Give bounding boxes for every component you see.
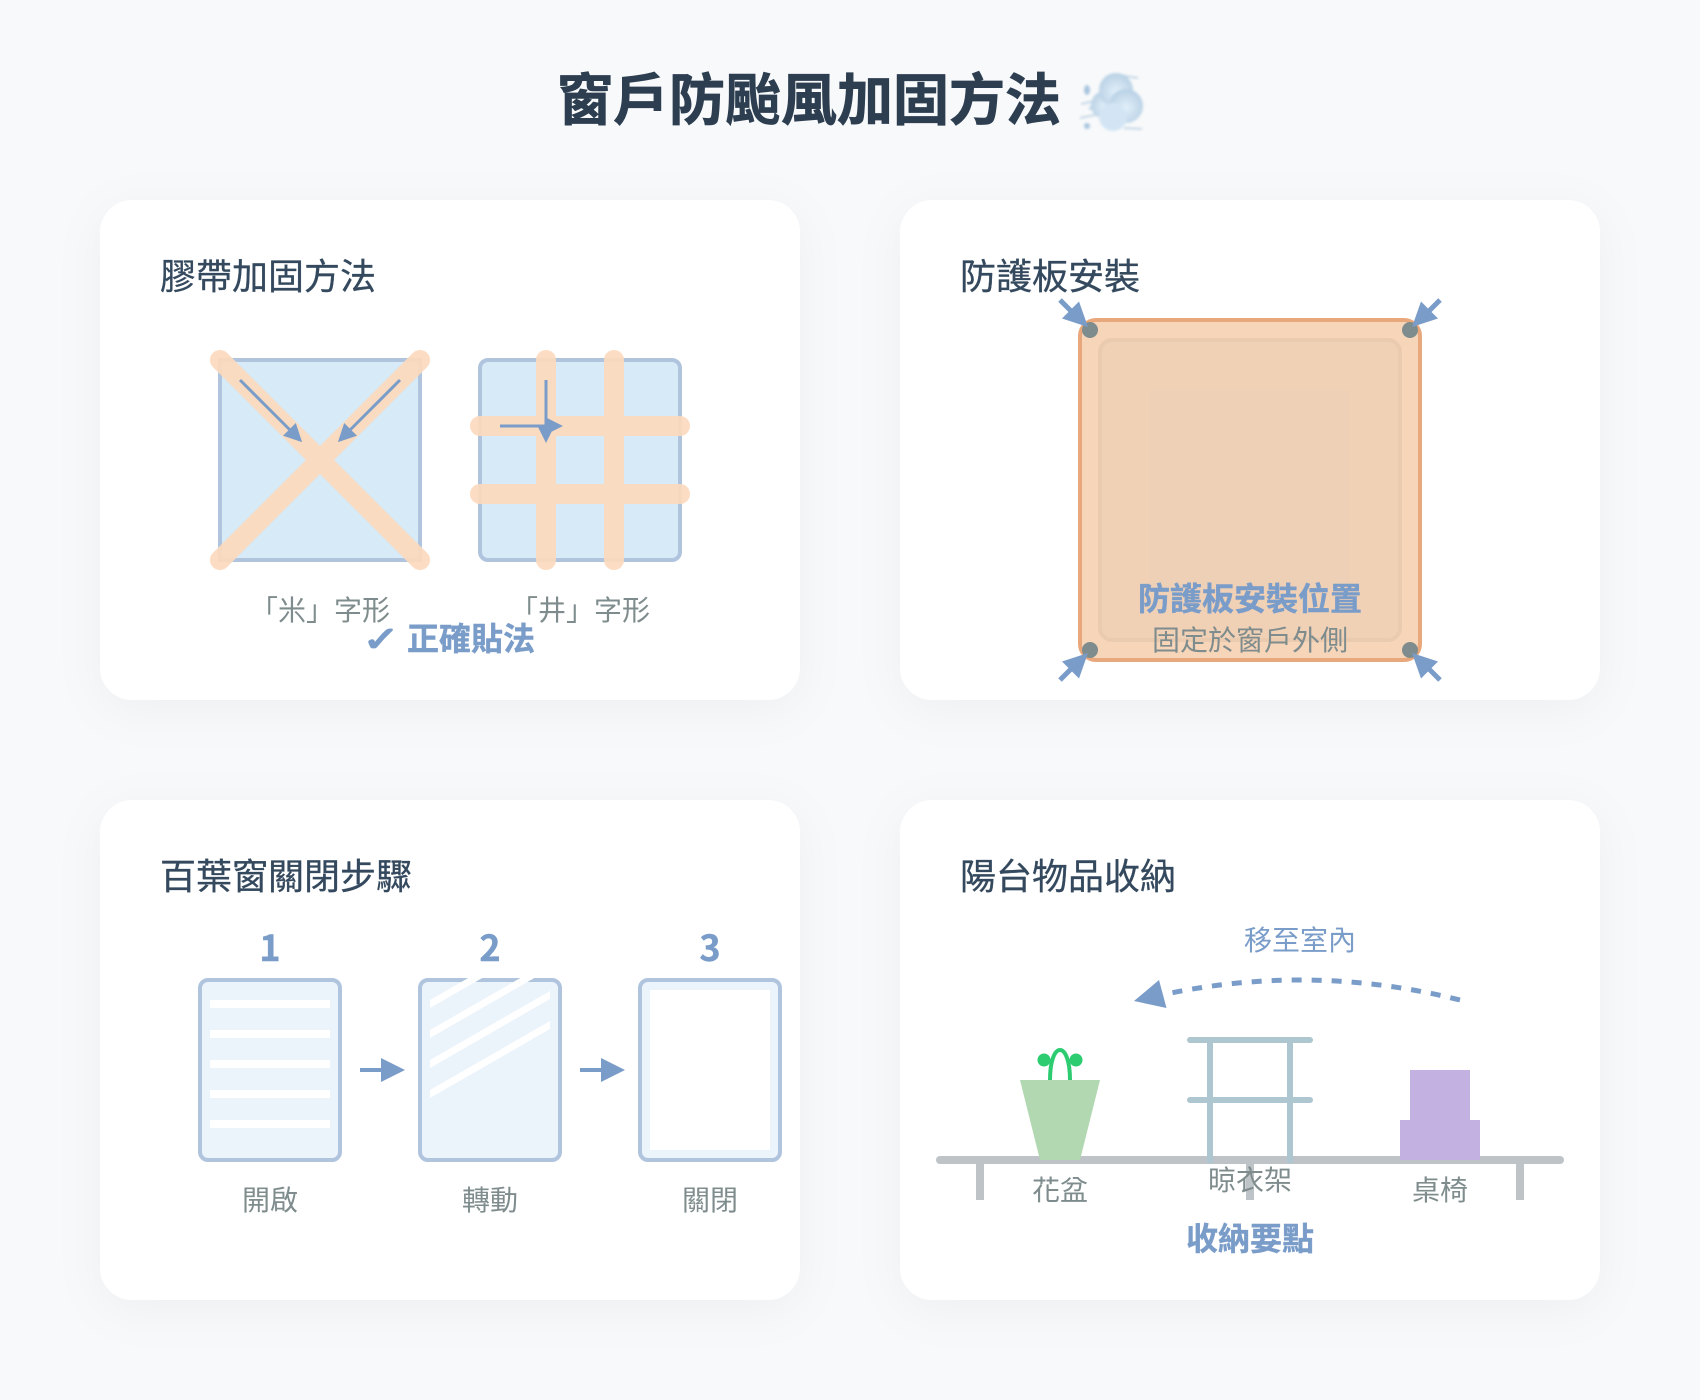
arrow: step 1 to 2: [360, 1058, 405, 1082]
label: 米 shape: 「米」字形: [250, 589, 390, 629]
screw: bottom right: [1402, 642, 1418, 658]
label: storage key points: 收納要點: [1186, 1214, 1314, 1260]
heading: shutter steps: 百葉窗關閉步驟: [160, 848, 412, 900]
number 2: 2: [479, 920, 501, 972]
arrow: bottom right: [1412, 653, 1440, 680]
icon: wind emoji: [1080, 73, 1143, 131]
screw: top left: [1082, 322, 1098, 338]
shutter closed: [640, 980, 780, 1160]
window: 米 shape: [220, 360, 420, 560]
panel: shutter closing steps: [162, 858, 782, 1213]
arrow: step 2 to 3: [580, 1058, 625, 1082]
icon: table and chair: [1400, 1070, 1480, 1160]
heading: balcony storage: 陽台物品收納: [960, 848, 1176, 900]
arrow: move indoors: [1134, 980, 1460, 1008]
number 3: 3: [699, 920, 721, 972]
number 1: 1: [259, 920, 281, 972]
step 2: rotate: [420, 920, 560, 1219]
icon: flower pot: [1020, 1050, 1100, 1160]
arrow: top left: [1060, 300, 1088, 327]
label: rotate: 轉動: [462, 1179, 518, 1219]
label: closed: 關閉: [682, 1179, 738, 1219]
arrow: bottom left: [1060, 653, 1088, 680]
label: flower pot: 花盆: [1032, 1169, 1088, 1209]
label: move indoors: 移至室內: [1244, 919, 1356, 959]
label: drying rack: 晾衣架: [1208, 1159, 1292, 1199]
shelf: [940, 1160, 1560, 1200]
panel: protective board: [900, 200, 1600, 700]
step 3: closed: [640, 920, 780, 1219]
panel: balcony storage: [900, 800, 1600, 1300]
screw: bottom left: [1082, 642, 1098, 658]
callout: correct application: ✓: [363, 620, 399, 660]
label: open: 開啟: [242, 1179, 298, 1219]
label: board position: 防護板安裝位置: [1138, 574, 1362, 620]
shutter open: [200, 980, 340, 1160]
step 1: open: [200, 920, 340, 1219]
icon: drying rack: [1190, 1040, 1310, 1163]
heading: protective board: 防護板安裝: [960, 248, 1140, 300]
label: 井 shape: 「井」字形: [510, 589, 650, 629]
label: fixed outside the window: 固定於窗戶外側: [1152, 619, 1348, 659]
shutter rotating: [418, 978, 562, 1162]
title: 窗戶防颱風加固方法: [557, 56, 1061, 137]
arrow: top right: [1412, 300, 1440, 327]
screw: top right: [1402, 322, 1418, 338]
window: 井 shape: [480, 360, 680, 560]
heading: tape methods: 膠帶加固方法: [160, 248, 376, 300]
protective board drawing: [1080, 320, 1420, 660]
panel: tape reinforcement: [100, 200, 800, 700]
label: table and chair: 桌椅: [1412, 1169, 1468, 1209]
callout: correct application: 正確貼法: [407, 614, 535, 660]
